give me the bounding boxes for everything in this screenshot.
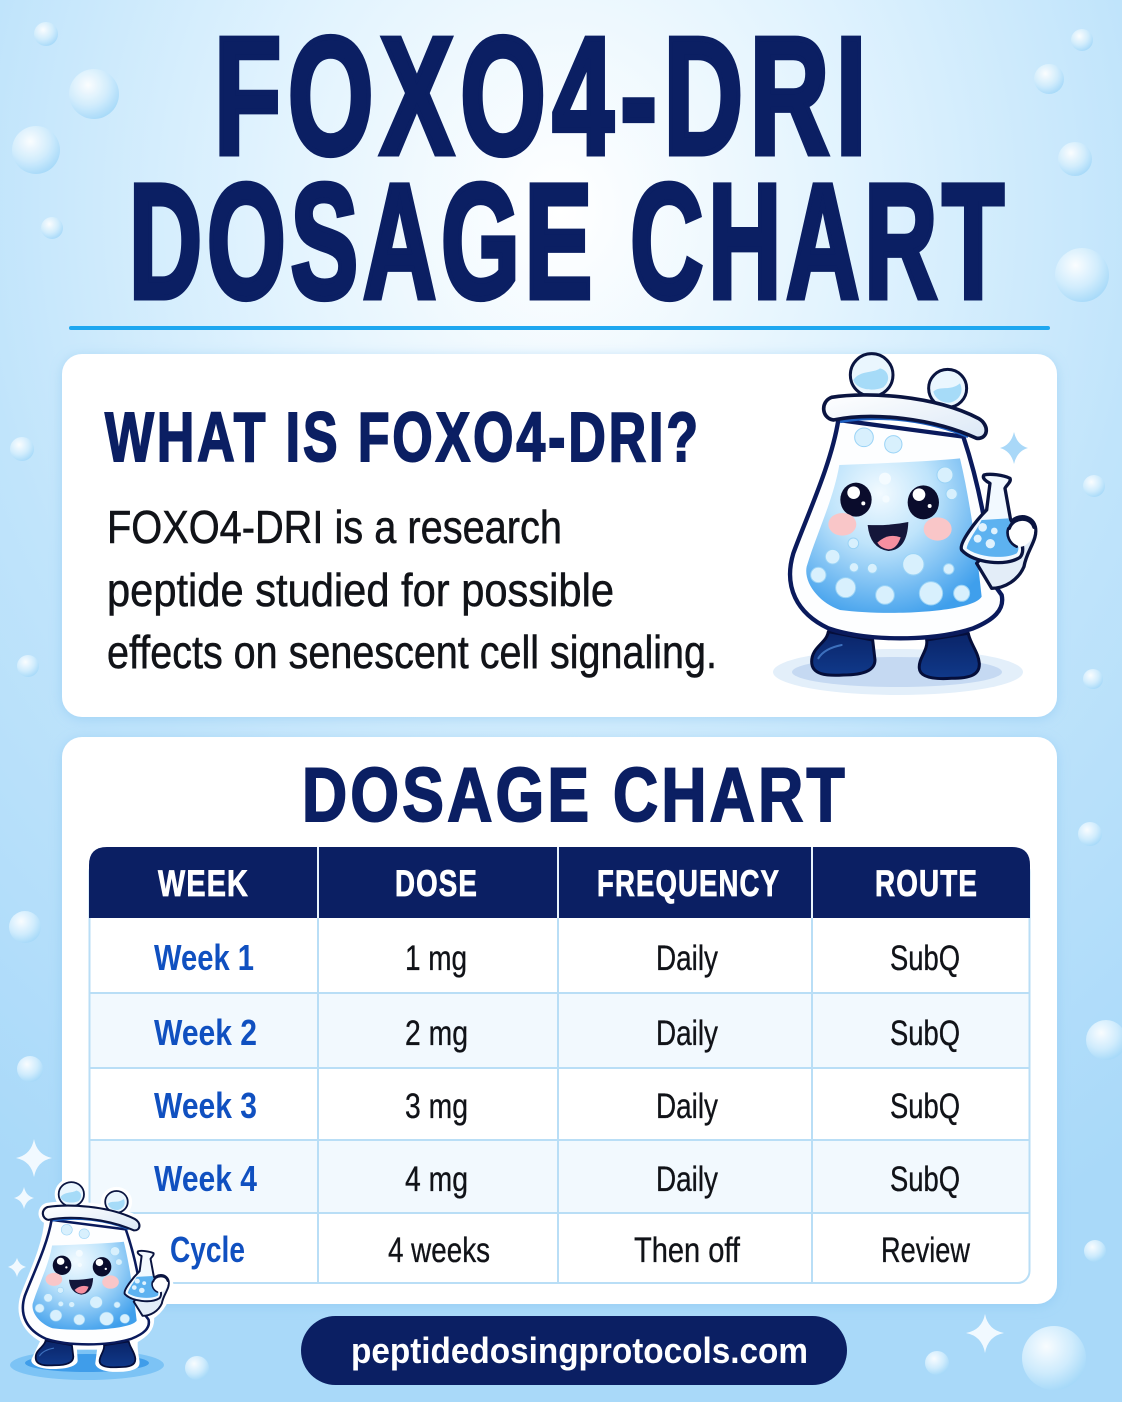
title [129,4,1009,332]
description text: effects on senescent cell signaling. [107,626,717,678]
table header: WEEK [158,863,249,904]
row: week 3: Daily [656,1087,718,1126]
row: week 3: SubQ [890,1087,960,1126]
table [89,847,1030,1283]
row: week 1: Week 1 [154,937,254,978]
table header: FREQUENCY [597,863,780,904]
row: cycle: Then off [634,1231,740,1270]
row: week 1: SubQ [890,939,960,978]
description text [107,501,717,678]
row: week 3: 3 mg [405,1087,468,1126]
row: week 2: SubQ [890,1014,960,1053]
row: week 3 [154,1085,960,1126]
row: cycle: Cycle [170,1229,245,1270]
table header: DOSE [395,863,478,904]
footer url pill: peptidedosingprotocols.com [351,1330,808,1371]
row: week 1: 1 mg [405,939,467,978]
row: week 2: Week 2 [154,1012,257,1053]
table header [89,847,1030,918]
row: week 4: Daily [656,1160,718,1199]
icon: flask mascot [773,354,1036,695]
row: cycle: Review [881,1231,971,1270]
row: week 4: 4 mg [405,1160,468,1199]
title divider [69,326,1050,330]
panel: dosage chart [62,737,1057,1304]
row: week 2 [154,1012,960,1053]
row: week 3: Week 3 [154,1085,257,1126]
row: week 2: 2 mg [405,1014,468,1053]
row: week 1 [154,937,960,978]
row: week 4 [154,1158,960,1199]
heading: what is: WHAT IS FOXO4-DRI? [105,398,701,476]
sparkles [8,1139,1004,1353]
row: cycle: 4 weeks [388,1231,490,1270]
description text: peptide studied for possible [107,564,614,616]
row: week 2: Daily [656,1014,718,1053]
table header: ROUTE [875,863,978,904]
icon: sparkle [1000,432,1028,464]
footer url pill [301,1316,847,1385]
description text: FOXO4-DRI is a research [107,501,562,553]
panel: what is FOXO4-DRI [62,354,1057,717]
row: week 4: Week 4 [154,1158,257,1199]
row: cycle [170,1229,971,1270]
icon: small flask mascot [10,1182,169,1380]
heading: dosage chart: DOSAGE CHART [302,753,848,838]
row: week 4: SubQ [890,1160,960,1199]
row: week 1: Daily [656,939,718,978]
